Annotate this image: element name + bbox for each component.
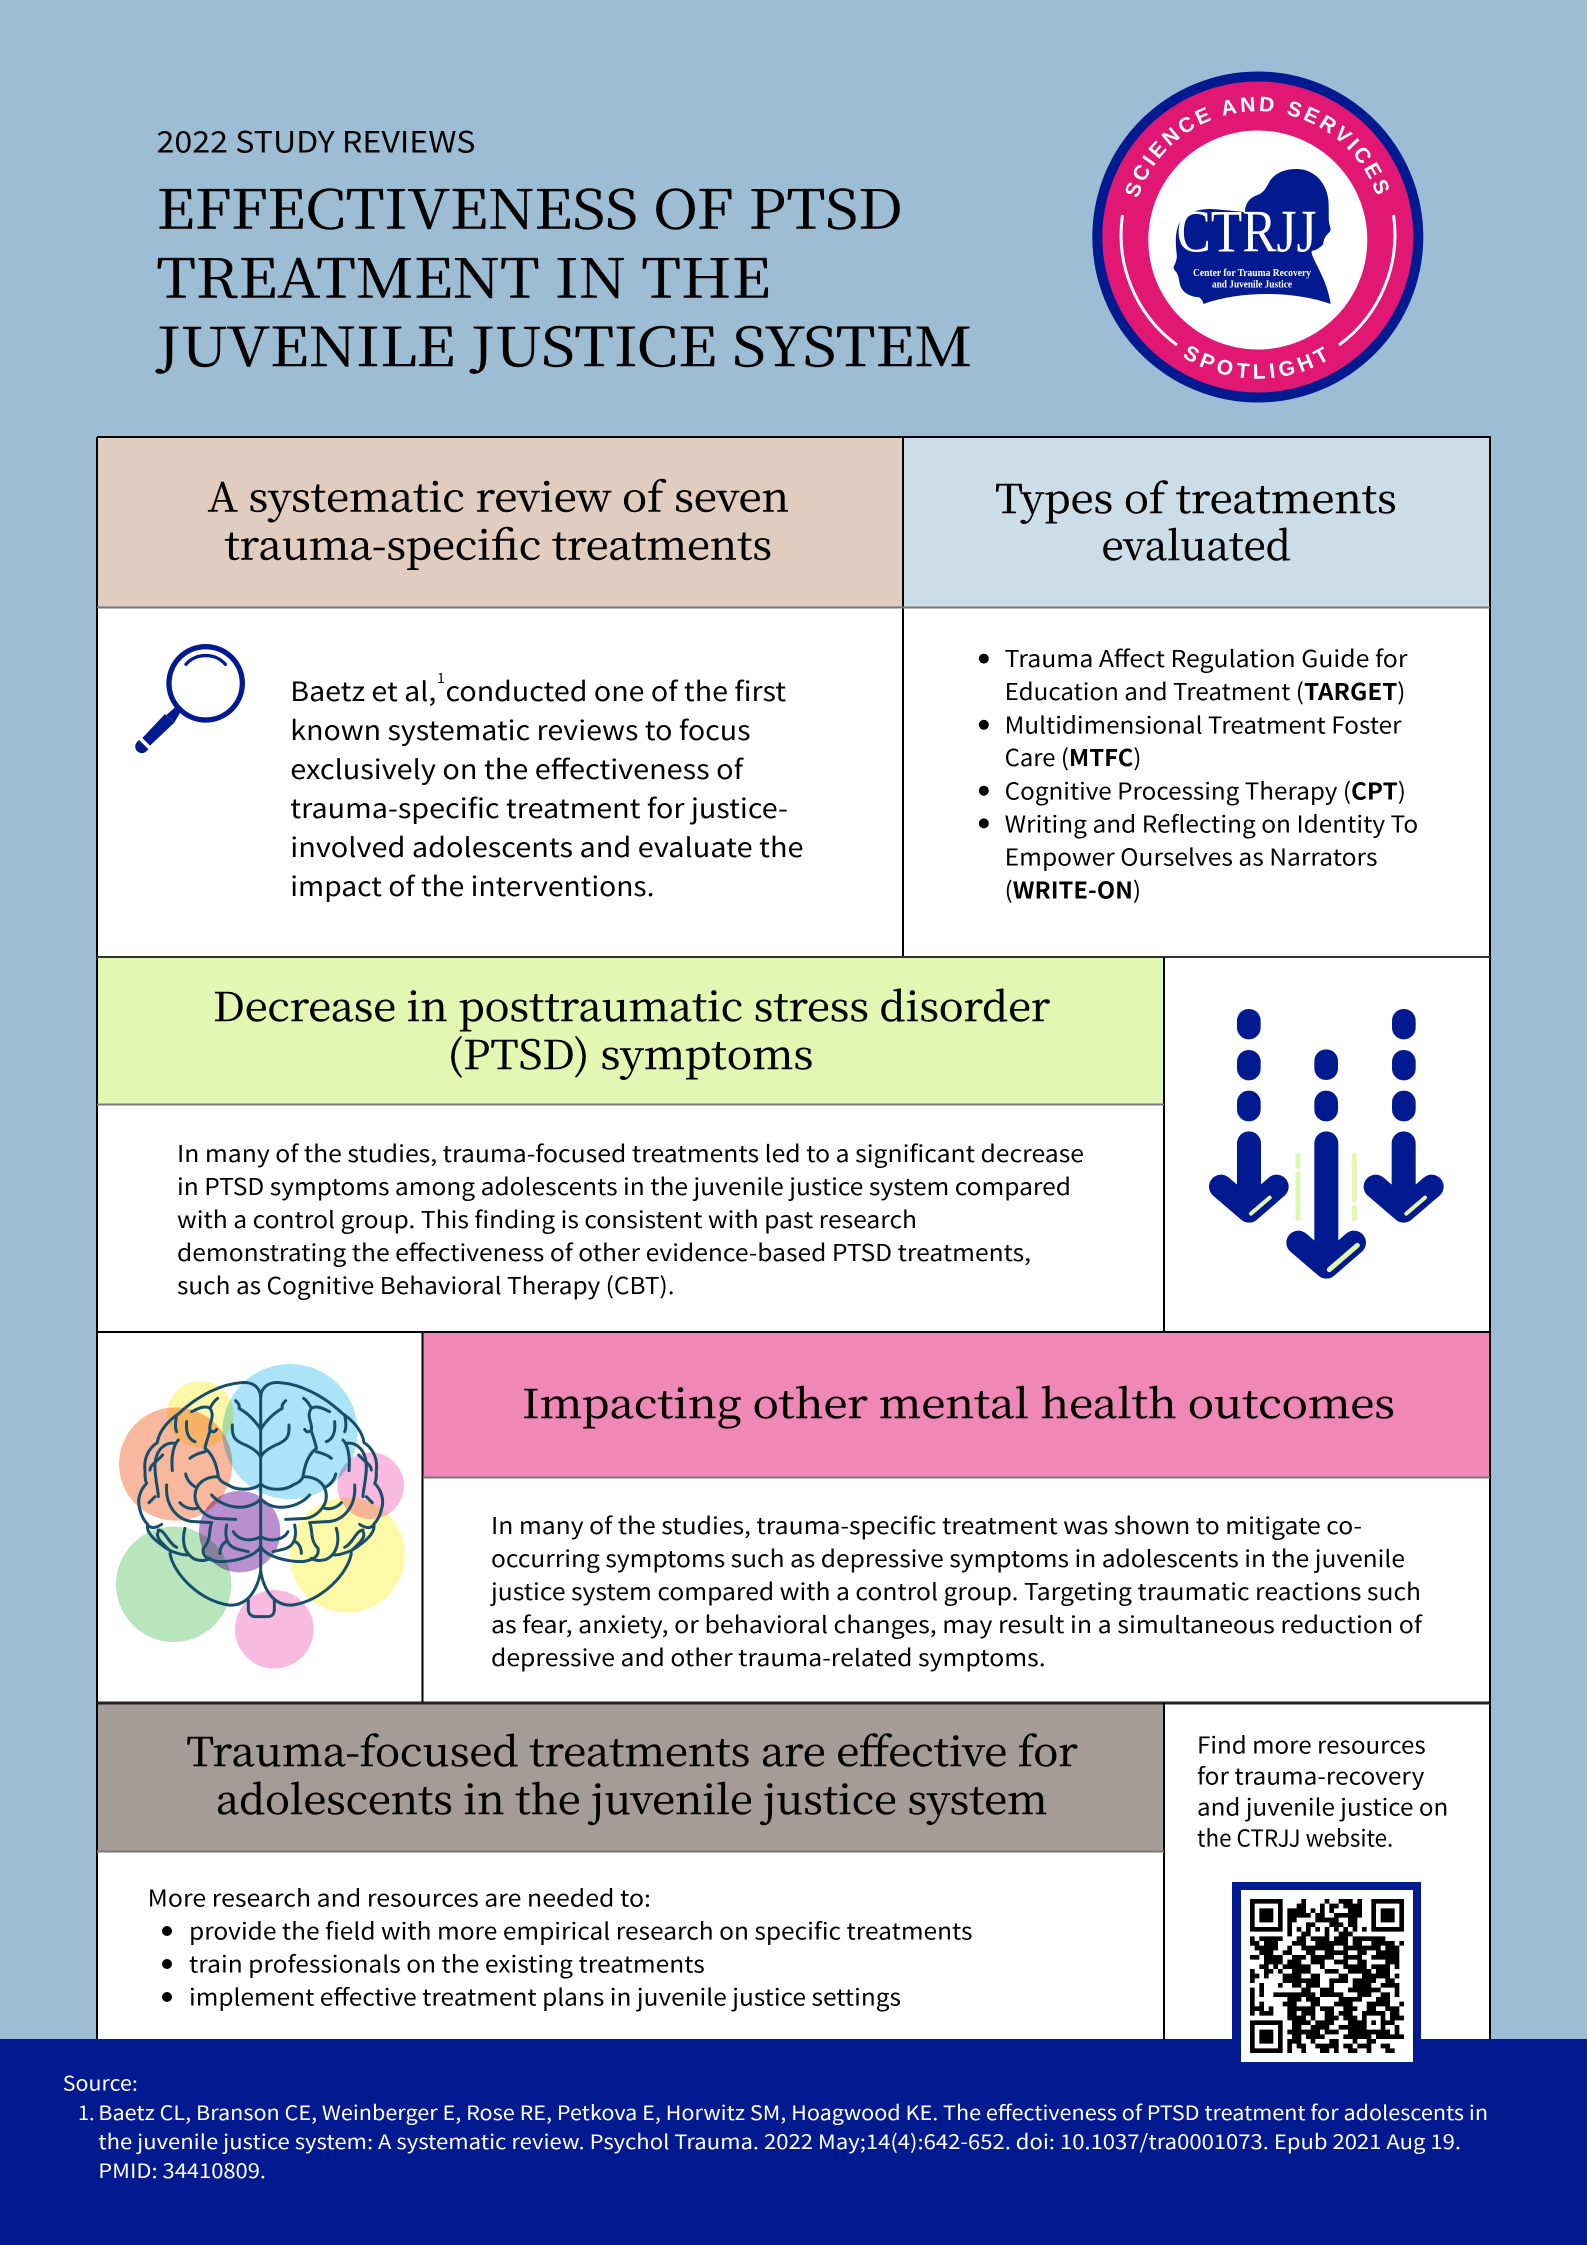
heading: systematic review: trauma-specific treatments (224, 514, 772, 571)
icon: magnifying glass (135, 647, 242, 753)
badge: science and services spotlight: and Juvenile Justice (1212, 280, 1292, 291)
kicker: 2022 STUDY REVIEWS (156, 120, 476, 162)
panel: decrease in PTSD symptoms (97, 957, 1432, 1301)
text: find more resources: Find more resources (1197, 1726, 1426, 1760)
text: decrease: such as Cognitive Behavioral Therapy (CBT). (177, 1267, 674, 1301)
list: treatments (979, 640, 1418, 905)
text: impacting (489, 1507, 1424, 1673)
text: impacting: In many of the studies, trauma-specific treatment was shown to mitigate co- (491, 1507, 1362, 1541)
panel: other mental health outcomes (116, 1333, 1490, 1673)
text: baetz: known systematic reviews to focus (290, 709, 750, 748)
heading: trauma-focused (186, 1721, 1078, 1826)
text: baetz (290, 668, 804, 904)
list: treatments: (WRITE-ON) (1005, 871, 1141, 905)
text: more research: provide the field with more empirical research on specific treatments (189, 1913, 972, 1947)
list: treatments: Care (MTFC) (1005, 739, 1142, 773)
main title: JUVENILE JUSTICE SYSTEM (155, 305, 973, 382)
logo subtitle: Center for Trauma Recovery (1193, 268, 1312, 279)
text: more research: implement effective treatment plans in juvenile justice settings (189, 1978, 901, 2012)
footer: source: Source: (63, 2068, 138, 2097)
badge text bottom: SPOTLIGHT (1184, 346, 1326, 379)
heading: impacting: Impacting other mental health outcomes (522, 1373, 1395, 1430)
list: treatments: Trauma Affect Regulation Guide for (1005, 640, 1408, 674)
text: find more resources: for trauma-recovery (1197, 1758, 1424, 1792)
text: impacting: depressive and other trauma-related symptoms. (491, 1639, 1046, 1673)
text: decrease: in PTSD symptoms among adolescents in the juvenile justice system compared (177, 1168, 1071, 1202)
badge: science and services spotlight (1092, 72, 1424, 402)
icon: downward arrows (1221, 1009, 1432, 1270)
text: baetz: trauma-specific treatment for justice- (290, 787, 788, 826)
text: find more resources: the CTRJJ website. (1197, 1820, 1393, 1854)
heading: trauma-focused: adolescents in the juvenile justice system (216, 1769, 1048, 1826)
text: more research: train professionals on the existing treatments (189, 1946, 705, 1980)
text: find more resources: and juvenile justice on (1197, 1789, 1448, 1823)
panel: types of treatments (903, 437, 1490, 905)
panel: trauma-focused treatments effective (97, 1704, 1164, 2012)
text: impacting: justice system compared with a control group. Targeting traumatic reactions such (489, 1573, 1421, 1607)
text: more research: More research and resources are needed to: (148, 1880, 651, 1914)
list: treatments: Cognitive Processing Therapy ( CPT) (1005, 773, 1406, 807)
QR code (1232, 1882, 1421, 2062)
icon: brain with coloured circles (116, 1364, 405, 1669)
heading: decrease (213, 976, 1051, 1081)
main title: TREATMENT IN THE (156, 236, 770, 313)
panel: systematic review (97, 437, 903, 904)
logo wordmark: CTRJJ (1176, 199, 1316, 265)
list: treatments: Writing and Reflecting on Identity To (1005, 805, 1418, 839)
footer: source (0, 2039, 1587, 2245)
text: baetz: 1 (437, 668, 445, 688)
main panel background (97, 437, 1490, 2047)
text: decrease: with a control group. This finding is consistent with past research (177, 1201, 917, 1235)
heading: types: Types of treatments (995, 468, 1397, 525)
list: treatments: Education and Treatment ( TARGET) (1005, 673, 1405, 707)
logo silhouette (1174, 169, 1331, 304)
footer: source: the juvenile justice system: A systematic review. Psychol Trauma. 2022 May;14(4):642-652. doi: 10.1037/tra0001073. Epub 2021 Aug 19. (98, 2126, 1461, 2155)
main title (155, 167, 973, 382)
text: find more resources (1197, 1726, 1448, 1854)
text: impacting: as fear, anxiety, or behavioral changes, may result in a simultaneous reduction of (491, 1606, 1424, 1640)
footer: source: PMID: 34410809. (98, 2155, 266, 2184)
text: baetz: impact of the interventions. (290, 865, 654, 904)
text: baetz: conducted one of the first (446, 670, 786, 709)
text: baetz: exclusively on the effectiveness of (290, 748, 745, 787)
text: baetz: involved adolescents and evaluate the (290, 826, 804, 865)
heading: decrease: Decrease in posttraumatic stress disorder (213, 976, 1051, 1033)
title block (155, 120, 973, 382)
footer: source: Baetz CL, Branson CE, Weinberger E, Rose RE, Petkova E, Horwitz SM, Hoagwood KE. The effectiveness of PTSD treatment for adolescents in (98, 2097, 1488, 2126)
list: treatments: Multidimensional Treatment Foster (1005, 706, 1402, 740)
text: more research (148, 1880, 972, 2012)
heading: systematic review (208, 467, 789, 571)
text: impacting: occurring symptoms such as depressive symptoms in adolescents in the juvenile (491, 1540, 1405, 1574)
text: baetz: Baetz et al, (290, 670, 436, 709)
text: decrease: In many of the studies, trauma-focused treatments led to a significant decrease (177, 1135, 1084, 1169)
text: decrease: demonstrating the effectiveness of other evidence-based PTSD treatments, (177, 1234, 1031, 1268)
badge text top: SCIENCE AND SERVICES (1126, 96, 1389, 197)
main title: EFFECTIVENESS OF PTSD (156, 167, 903, 244)
heading: types (995, 468, 1397, 572)
grid lines (97, 437, 1490, 2040)
heading: decrease: (PTSD) symptoms (448, 1024, 814, 1081)
heading: trauma-focused: Trauma-focused treatments are effective for (186, 1721, 1078, 1778)
heading: systematic review: A systematic review of seven (208, 467, 789, 524)
text: decrease (177, 1135, 1084, 1301)
list: treatments: Empower Ourselves as Narrators (1005, 838, 1378, 872)
footer: source: 1. (78, 2097, 94, 2126)
heading: types: evaluated (1102, 515, 1291, 572)
